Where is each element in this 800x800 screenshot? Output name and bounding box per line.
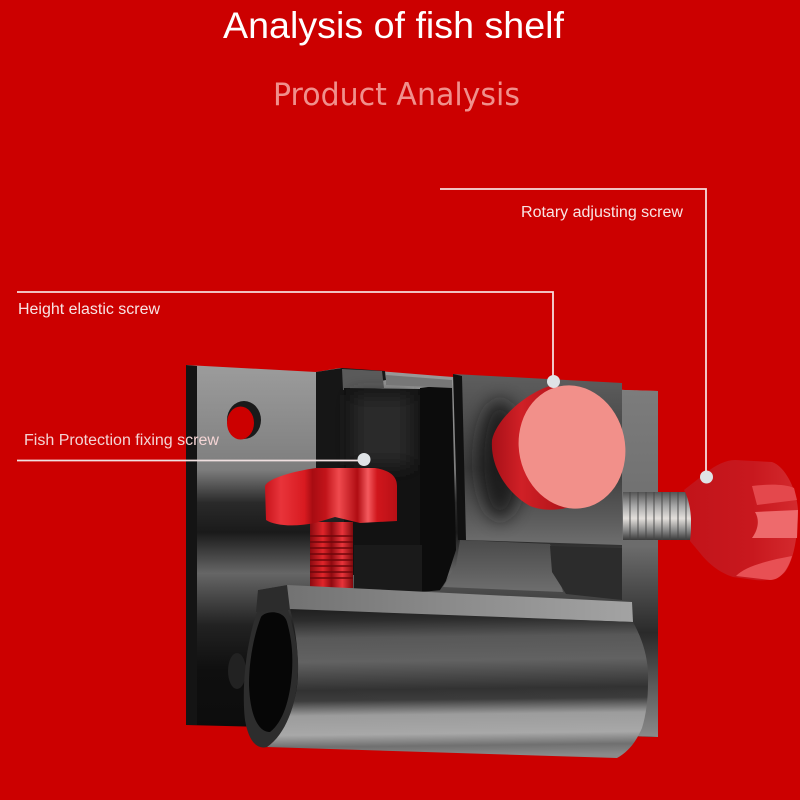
mounting hole	[227, 401, 261, 440]
callout: fish protection fixing screw	[17, 432, 370, 466]
callout: rotary adjusting screw	[440, 189, 713, 484]
barrel clamp	[228, 585, 648, 758]
subtitle: Product Analysis	[273, 77, 520, 113]
callout: height elastic screw	[17, 292, 560, 388]
label: rotary adjusting screw: Rotary adjusting screw	[521, 204, 684, 221]
product: fish shelf bracket	[186, 365, 798, 758]
label: fish protection fixing screw: Fish Protection fixing screw	[24, 432, 220, 449]
right side plate	[440, 390, 658, 737]
fixing screw knob	[265, 468, 397, 525]
side knob	[684, 460, 798, 580]
label: height elastic screw: Height elastic screw	[18, 301, 161, 318]
steel screw shaft	[623, 492, 691, 540]
center channel	[316, 368, 456, 592]
rotary screw knob	[492, 375, 637, 519]
title: Analysis of fish shelf	[223, 5, 565, 46]
fixing screw thread	[310, 522, 353, 588]
back plate	[186, 365, 658, 737]
adjusting block	[453, 374, 622, 545]
lower step under block	[443, 540, 622, 600]
